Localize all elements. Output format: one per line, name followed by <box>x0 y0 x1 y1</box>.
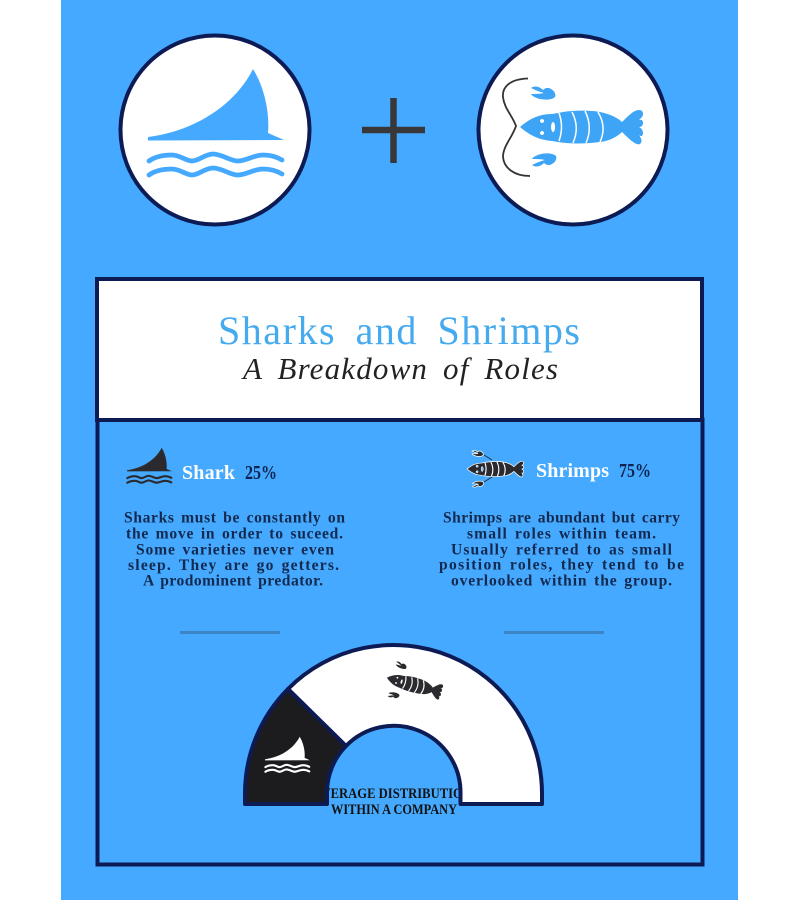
heading: shark 25%: 25% <box>245 462 277 484</box>
text block: shark description: Sharks must be constantly on <box>124 510 345 526</box>
subtitle: A Breakdown of Roles <box>241 351 558 386</box>
panel: title box <box>97 279 702 420</box>
panel: lower content box <box>98 420 702 864</box>
heading: shrimps 75%: Shrimps <box>536 460 609 482</box>
heading: shrimps 75%: 75% <box>619 460 651 482</box>
icon: small shark fin <box>127 448 172 483</box>
caption: WITHIN A COMPANY <box>331 802 457 818</box>
text block: shark description: the move in order to suceed. <box>126 526 343 542</box>
text block: shark description: A prodominent predator. <box>143 572 323 590</box>
caption: AVERAGE DISTRIBUTION <box>314 786 472 802</box>
divider: right <box>504 631 604 634</box>
text block: shark description: sleep. They are go getters. <box>128 557 339 574</box>
text block: shrimps description: Shrimps are abundant but carry <box>443 510 680 526</box>
heading: shark 25% <box>182 462 277 484</box>
chart segment: shark 25% <box>245 689 346 804</box>
text block: shrimps description: position roles, they tend to be <box>439 556 684 574</box>
icon: shark in chart <box>265 737 310 772</box>
icon: small shrimp <box>467 450 524 487</box>
text block: shrimps description: overlooked within the group. <box>451 572 672 590</box>
text block: shrimps description: Usually referred to as small <box>451 542 673 558</box>
heading: shrimps 75% <box>536 460 651 482</box>
text block: shrimps description: small roles within team. <box>467 526 656 542</box>
icon: shrimp in chart <box>382 660 446 710</box>
text block: shark description <box>124 510 345 590</box>
chart segment: shrimps 75% <box>288 645 542 804</box>
chart: semicircular distribution <box>245 645 542 804</box>
caption <box>314 786 472 818</box>
icon: shark fin circle <box>120 36 310 224</box>
text block: shark description: Some varieties never even <box>136 542 334 558</box>
icon: shrimp circle <box>478 36 668 224</box>
heading: shark 25%: Shark <box>182 462 236 484</box>
title: Sharks and Shrimps <box>218 308 580 353</box>
divider: left <box>180 631 280 634</box>
icon: plus sign <box>362 98 425 163</box>
text block: shrimps description <box>439 510 684 590</box>
